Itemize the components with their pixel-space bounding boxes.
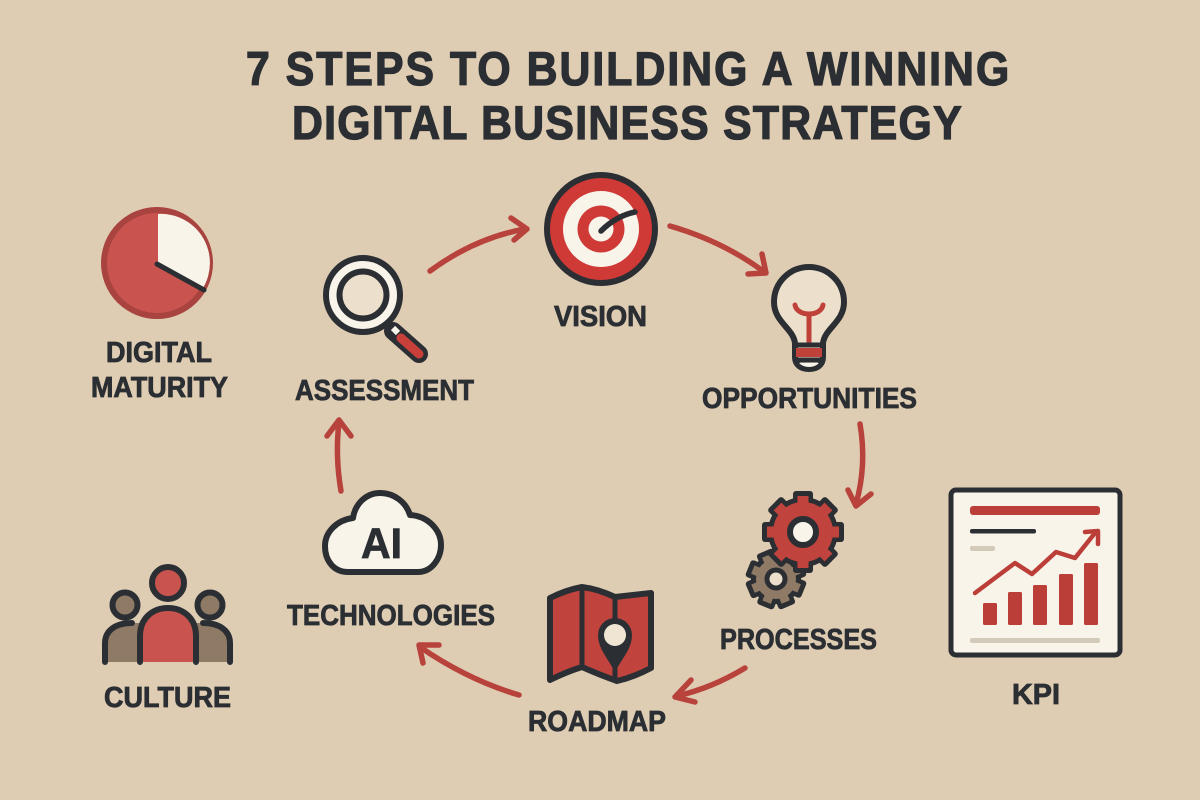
panel: technologies step: [287, 493, 495, 632]
label: opportunities: OPPORTUNITIES: [702, 383, 917, 415]
panel: digital maturity: [91, 210, 228, 404]
icon: small gear: [737, 540, 815, 618]
bar chart: [983, 563, 1098, 625]
icon: gears: [737, 491, 844, 618]
icon: large gear: [762, 491, 844, 573]
icon: target: [547, 175, 655, 283]
trend line arrow: [975, 531, 1098, 593]
icon: light bulb: [774, 267, 844, 369]
icon: AI cloud: AI: [361, 520, 402, 568]
arrow: processes to roadmap: [675, 668, 745, 702]
icon: magnifying glass: [326, 258, 419, 354]
icon: pie gauge: [104, 210, 210, 316]
arrow: assessment to vision: [430, 218, 527, 271]
label: technologies: TECHNOLOGIES: [287, 600, 495, 632]
panel: assessment step: [295, 258, 475, 407]
panel: vision step: [547, 175, 655, 333]
label: KPI: KPI: [1012, 679, 1060, 711]
label: digital maturity: [91, 337, 228, 404]
panel: roadmap step: [528, 587, 666, 738]
arrow: opportunities to processes: [848, 424, 871, 506]
title: DIGITAL BUSINESS STRATEGY: [292, 96, 962, 150]
panel: KPI: [951, 490, 1120, 711]
panel: opportunities step: [702, 267, 917, 415]
label: digital maturity: DIGITAL: [106, 337, 212, 369]
label: assessment: ASSESSMENT: [295, 375, 475, 407]
icon: folded map with pin: [550, 587, 651, 681]
icon: group of people: [105, 567, 230, 662]
label: culture: CULTURE: [104, 682, 231, 714]
icon: KPI dashboard: [951, 490, 1120, 655]
label: processes: PROCESSES: [720, 624, 877, 656]
arrow: technologies to assessment: [327, 420, 351, 491]
panel: processes step: [720, 491, 877, 656]
icon: AI cloud: [325, 493, 441, 572]
arrow: roadmap to technologies: [419, 645, 519, 695]
label: digital maturity: MATURITY: [91, 372, 228, 404]
arrow: vision to opportunities: [670, 226, 766, 274]
title: [246, 42, 1009, 150]
label: roadmap: ROADMAP: [528, 706, 666, 738]
label: vision: VISION: [554, 301, 647, 333]
title: 7 STEPS TO BUILDING A WINNING: [246, 42, 1009, 96]
panel: culture: [104, 567, 231, 714]
